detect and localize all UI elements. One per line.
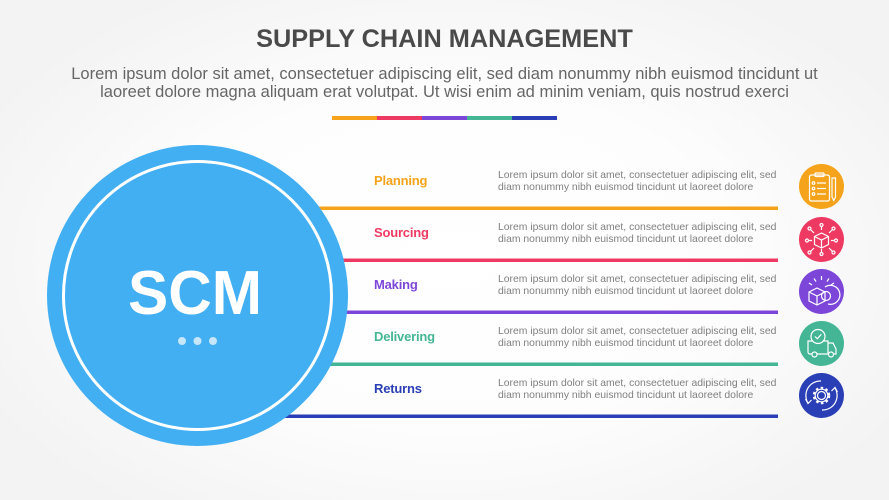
row: Planning: Lorem ipsum dolor sit amet, consectetuer adipiscing elit, sed [498,170,776,181]
row: Sourcing: Lorem ipsum dolor sit amet, consectetuer adipiscing elit, sed [498,222,776,233]
row: Planning: diam nonummy nibh euismod tincidunt ut laoreet dolore [498,182,753,193]
title: SUPPLY CHAIN MANAGEMENT [256,25,633,53]
row: Delivering: diam nonummy nibh euismod tincidunt ut laoreet dolore [498,338,753,349]
central SCM circle: SCM [128,259,262,328]
row: Making: Making [374,277,418,292]
row: Making: diam nonummy nibh euismod tincidunt ut laoreet dolore [498,286,753,297]
colour divider [332,116,557,120]
subtitle text [71,65,818,101]
row: Sourcing: diam nonummy nibh euismod tincidunt ut laoreet dolore [498,234,753,245]
row: Planning: Planning [374,173,427,188]
row: Returns [374,378,776,401]
subtitle text: Lorem ipsum dolor sit amet, consectetuer adipiscing elit, sed diam nonummy nibh euismod tincidunt ut [71,65,818,83]
icon: clipboard [799,164,844,209]
row: Making: Lorem ipsum dolor sit amet, consectetuer adipiscing elit, sed [498,274,776,285]
subtitle text: laoreet dolore magna aliquam erat volutpat. Ut wisi enim ad minim veniam, quis nostrud exerci [100,83,789,101]
row: Returns: diam nonummy nibh euismod tincidunt ut laoreet dolore [498,390,753,401]
icon: making box and gear [799,269,844,314]
row: Sourcing [374,222,776,245]
row: Delivering: Delivering [374,329,435,344]
row: Planning [374,170,776,193]
row: Returns: Lorem ipsum dolor sit amet, consectetuer adipiscing elit, sed [498,378,776,389]
row: Delivering [374,326,776,349]
row: Delivering: Lorem ipsum dolor sit amet, consectetuer adipiscing elit, sed [498,326,776,337]
row: Making [374,274,776,297]
central SCM circle [47,145,348,446]
row: Returns: Returns [374,381,422,396]
icon: returns gear cycle [799,373,844,418]
icon: delivery truck [799,321,844,366]
row: Sourcing: Sourcing [374,225,429,240]
icon: sourcing network box [799,217,844,262]
row lines [285,206,778,418]
